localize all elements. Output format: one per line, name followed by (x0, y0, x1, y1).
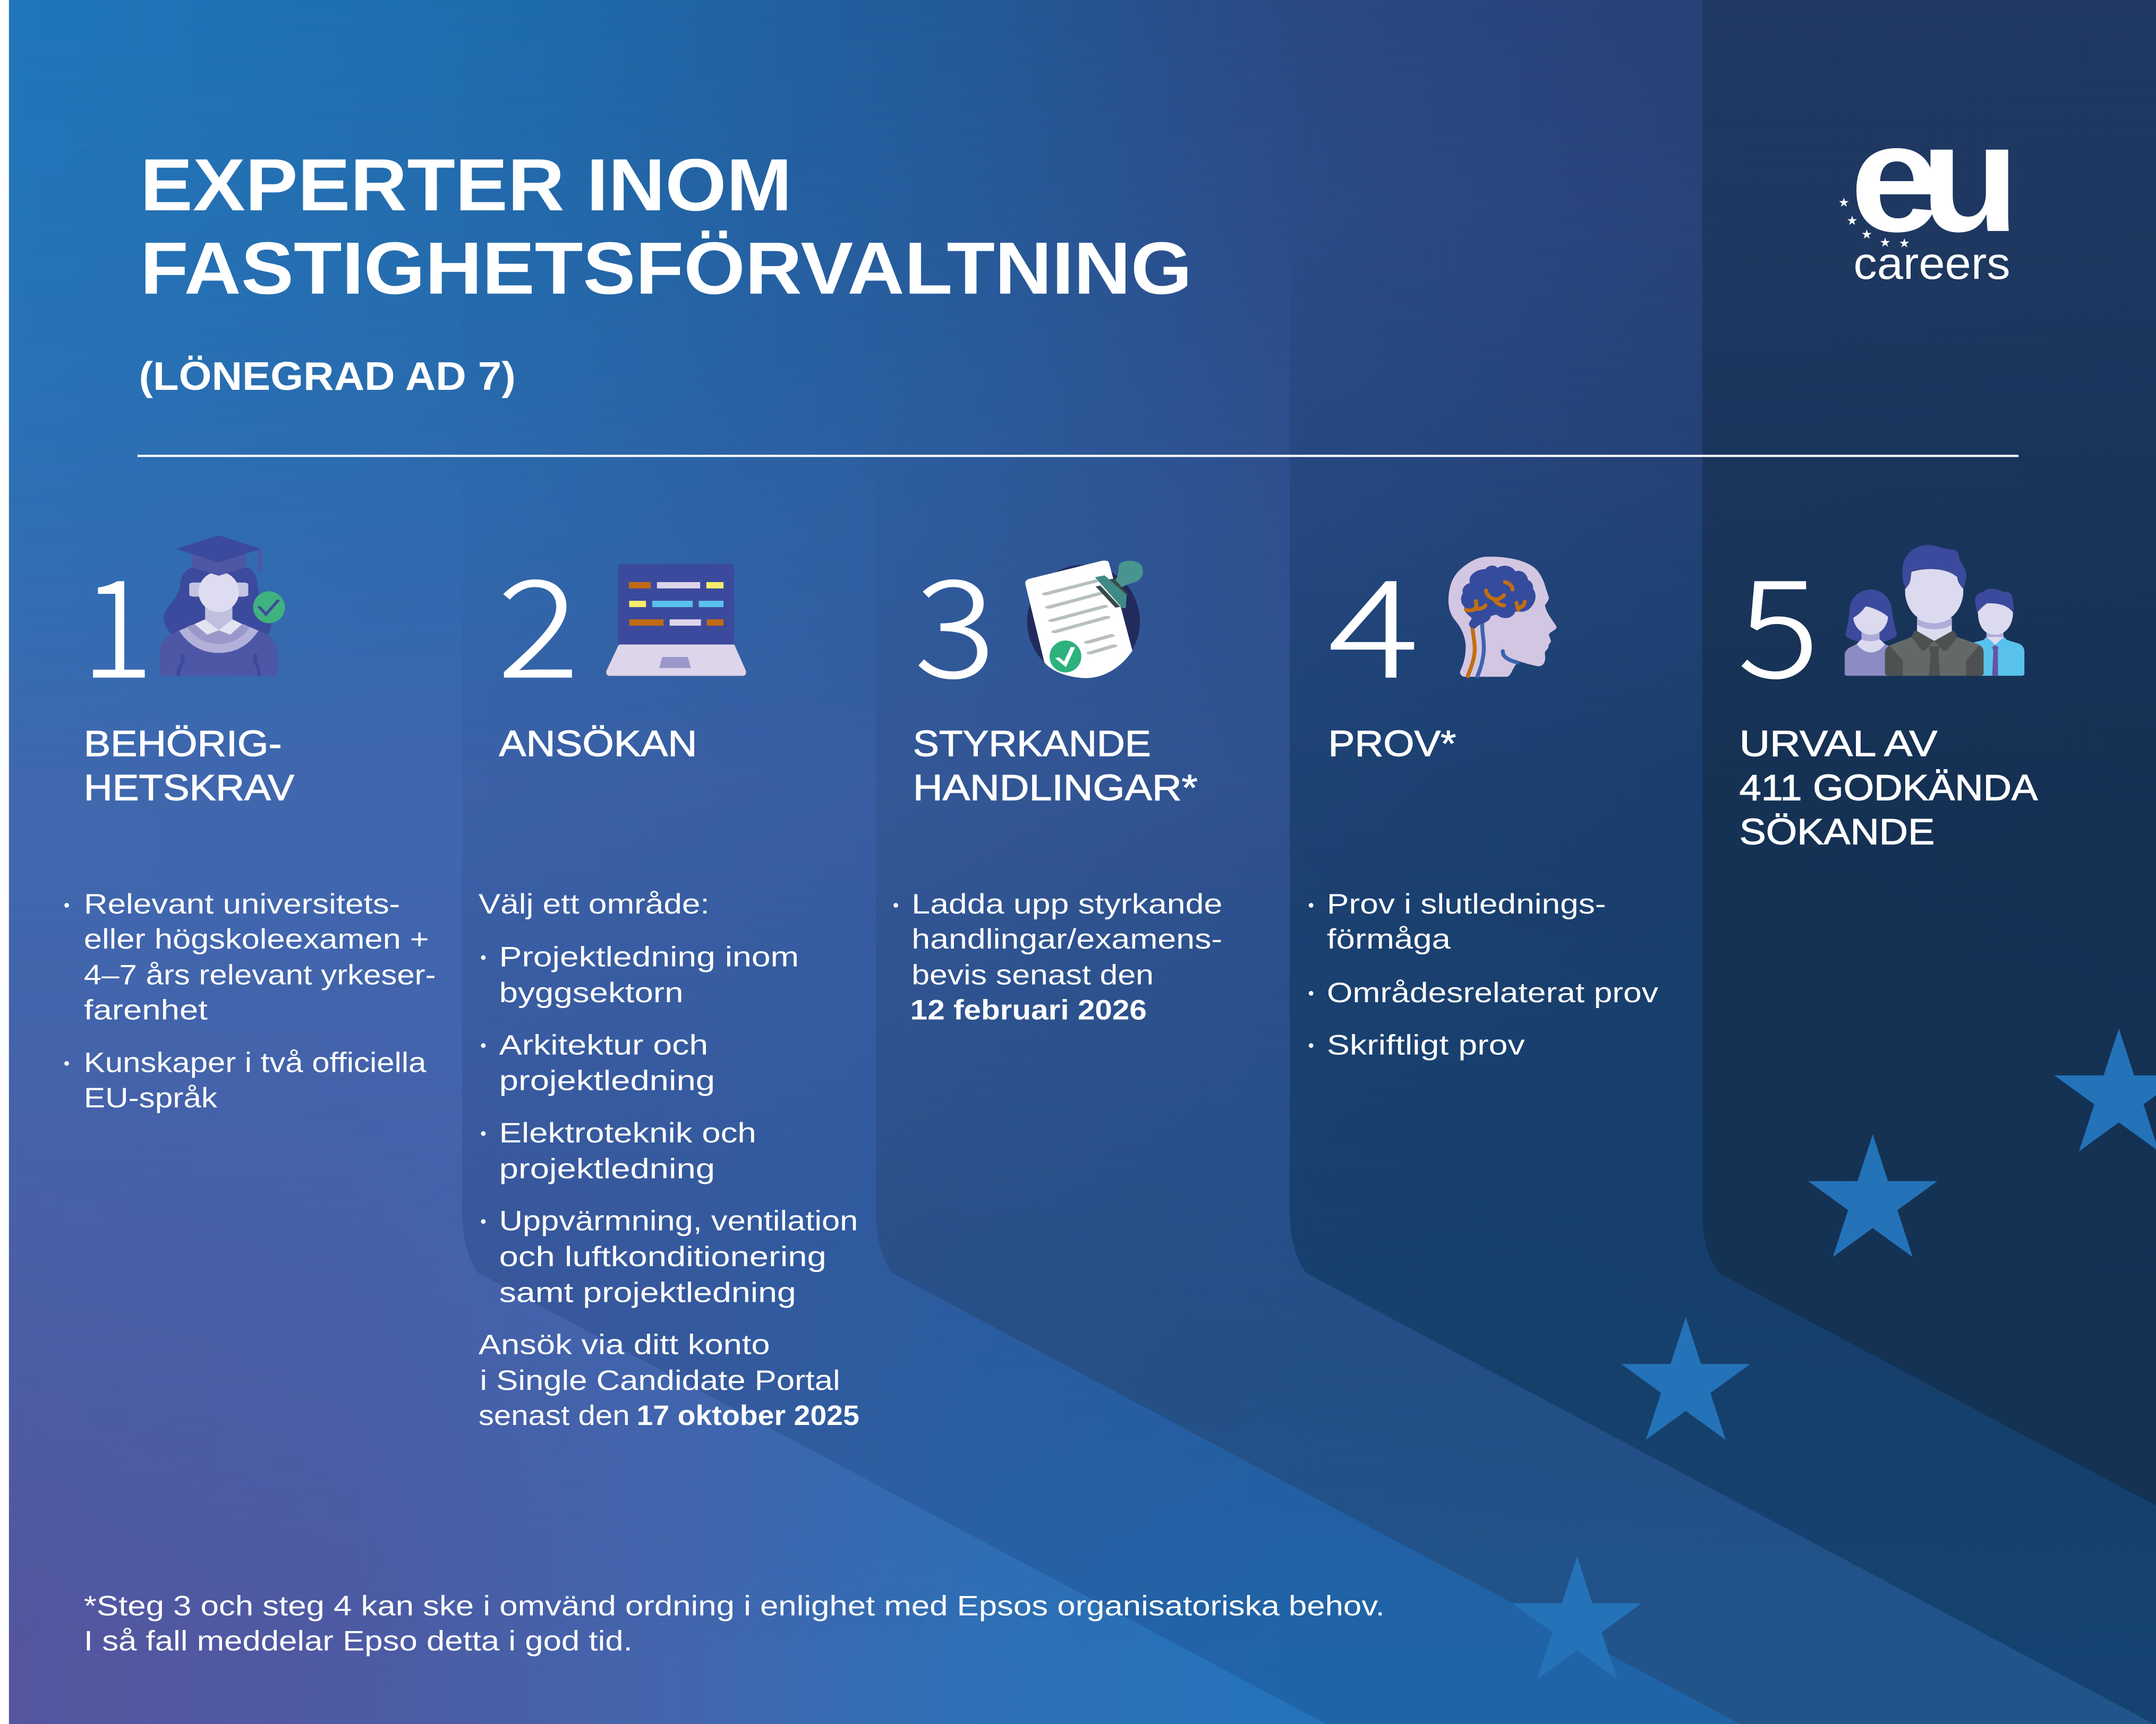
test list: Prov i slutlednings- (1327, 889, 1606, 920)
decorative EU stars (1513, 1028, 2156, 1679)
document instructions: handlingar/examens- (911, 924, 1222, 955)
heading (913, 723, 1198, 808)
apply note: senast den (479, 1400, 630, 1431)
requirements list: Relevant universitets- (84, 889, 400, 920)
document instructions (893, 889, 1222, 1026)
title: EXPERTER INOM (140, 143, 792, 226)
requirements list: farenhet (84, 994, 208, 1026)
test list (1309, 889, 1658, 1061)
intro line: Välj ett område: (479, 889, 710, 920)
field list: Elektroteknik och (499, 1117, 756, 1149)
icon: graduate (160, 535, 285, 676)
footnote: *Steg 3 och steg 4 kan ske i omvänd ordning i enlighet med Epsos organisatoriska behov. (84, 1591, 1385, 1622)
requirements list: EU-språk (84, 1082, 218, 1114)
footnote: I så fall meddelar Epso detta i god tid. (84, 1626, 633, 1657)
field list: projektledning (499, 1065, 715, 1097)
document instructions: Ladda upp styrkande (911, 889, 1222, 920)
field list: och luftkonditionering (499, 1241, 826, 1273)
field list: Arkitektur och (499, 1029, 708, 1061)
footnote (84, 1591, 1385, 1657)
field list: samt projektledning (499, 1277, 796, 1308)
logo: EU careers (1839, 92, 2019, 289)
heading: STYRKANDE (913, 723, 1151, 764)
test list: förmåga (1327, 924, 1451, 955)
logo: EU careers: careers (1853, 238, 2010, 289)
field list (481, 942, 858, 1308)
heading: ANSÖKAN (499, 723, 697, 764)
apply note (479, 1329, 859, 1431)
heading: PROV* (1328, 723, 1456, 764)
apply note: Ansök via ditt konto (479, 1329, 770, 1361)
test list: Områdesrelaterat prov (1327, 977, 1658, 1009)
heading (84, 723, 294, 808)
apply note: i Single Candidate Portal (480, 1365, 840, 1396)
step 3: supporting documents (893, 522, 1222, 1026)
document instructions: 12 februari 2026 (910, 994, 1147, 1026)
title: FASTIGHETSFÖRVALTNING (140, 227, 1192, 310)
document instructions: bevis senast den (911, 959, 1154, 991)
number 3: 3 (914, 522, 995, 716)
heading: BEHÖRIG- (84, 723, 282, 764)
field list: projektledning (499, 1153, 715, 1184)
heading: HETSKRAV (84, 767, 294, 808)
field list: Uppvärmning, ventilation (499, 1206, 858, 1237)
heading: 411 GODKÄNDA (1740, 767, 2038, 808)
icon: head with brain (1448, 557, 1557, 677)
logo: EU careers: e (1850, 92, 1941, 264)
title (140, 143, 1192, 310)
logo: EU careers: u (1921, 92, 2019, 264)
icon: laptop (606, 564, 746, 676)
requirements list (64, 889, 436, 1114)
heading (1740, 723, 2038, 852)
number 5: 5 (1738, 522, 1819, 716)
heading: HANDLINGAR* (913, 767, 1198, 808)
background column bands (462, 0, 2156, 1724)
step 1: eligibility (64, 522, 436, 1114)
field list: byggsektorn (499, 977, 684, 1009)
apply note: 17 oktober 2025 (637, 1400, 859, 1431)
field list: Projektledning inom (499, 942, 799, 973)
step 5: selection (1738, 522, 2038, 852)
subtitle: (LÖNEGRAD AD 7) (139, 354, 516, 398)
requirements list: Kunskaper i två officiella (84, 1047, 427, 1079)
step 2: application (479, 522, 859, 1431)
step 4: tests (1309, 522, 1658, 1061)
test list: Skriftligt prov (1327, 1029, 1525, 1061)
heading: URVAL AV (1740, 723, 1938, 764)
icon: document with stamp (1025, 561, 1143, 678)
number 2: 2 (498, 522, 579, 716)
heading: SÖKANDE (1740, 811, 1935, 852)
requirements list: eller högskoleexamen + (84, 924, 429, 955)
number 4: 4 (1328, 522, 1419, 716)
number 1: 1 (81, 522, 153, 716)
icon: three people (1845, 545, 2024, 676)
requirements list: 4–7 års relevant yrkeser- (84, 959, 436, 991)
